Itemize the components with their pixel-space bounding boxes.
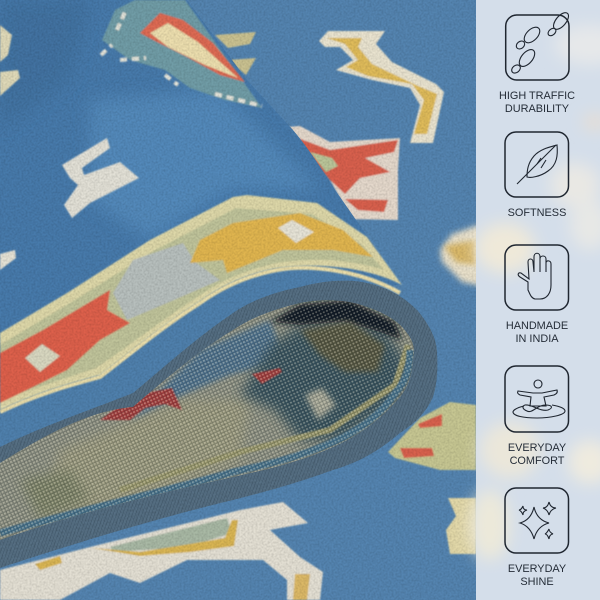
floor motif: right medallion lower [388,402,476,554]
floor motif: red flower [287,126,400,220]
border: yellow motif [190,213,373,273]
rug binding [0,281,437,568]
underside: yellow speckled band [120,345,408,490]
floor rug background [0,0,476,600]
icon: footprints [506,10,571,80]
border band [0,195,402,410]
blue edge pile [0,268,417,470]
underside: shadow under roll [270,300,402,340]
label: softness: SOFTNESS [508,207,566,219]
underside: dark teal field [240,325,412,440]
panel: feature sidebar [470,0,600,600]
underside: olive tones [56,401,246,506]
icon: meditation [505,366,568,432]
floor motif: yellow hook [215,31,444,143]
upper surface motif: red flower [101,0,262,108]
upper surface motif: white glyph [62,138,139,218]
underside of rug [0,300,414,540]
icon: sparkles [505,488,568,553]
pile texture [0,0,476,600]
underside: blue band at top left [130,320,285,420]
underside: light patch [305,388,336,420]
feature: high traffic durability [506,10,571,80]
label: everyday shine: EVERYDAY [508,563,567,575]
underside: red marks [100,388,182,420]
rug upper surface [0,0,400,430]
label: handmade in india: HANDMADE [506,320,568,332]
label: high traffic durability: DURABILITY [505,103,570,115]
sidebar background blobs [470,25,600,560]
underside: blue inner edge [0,350,410,533]
label: everyday comfort: EVERYDAY [508,442,567,454]
feature: handmade in india [505,245,568,310]
floor motif: small yellow marks [215,32,256,75]
upper surface: light sheen [90,90,320,240]
label: handmade in india: IN INDIA [516,333,559,345]
feature: softness [505,132,568,197]
icon: feather [505,132,568,197]
upper surface motif: left edge marks [0,25,20,270]
feature: everyday shine [505,488,568,553]
feature: everyday comfort [505,366,568,432]
border: grey medallion [113,243,220,320]
floor motif: right medallion top [440,226,500,290]
cream pile edge [0,268,400,412]
underside: woven texture [0,300,414,540]
label: high traffic durability: HIGH TRAFFIC [499,90,575,102]
icon: hand [505,245,568,310]
floor motif: white bottom shape [0,502,323,600]
upper surface: dark left shade [0,0,90,130]
label: everyday comfort: COMFORT [510,455,565,467]
label: everyday shine: SHINE [520,576,554,588]
border: red motif [0,290,130,403]
underside: dark olive patch [300,322,385,372]
